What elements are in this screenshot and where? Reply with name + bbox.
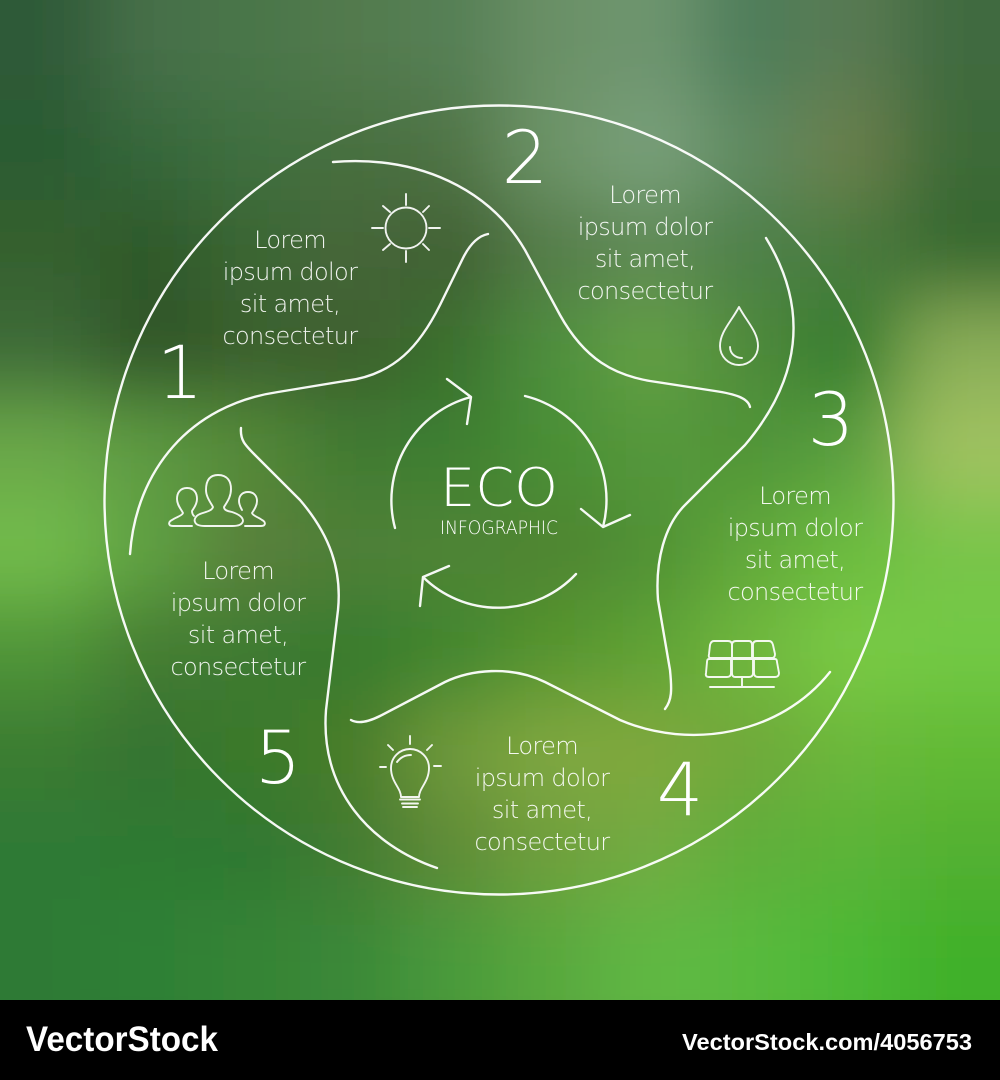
center: cycle arrows — [391, 379, 630, 608]
step 4 text: consectetur — [474, 828, 610, 856]
step 2 number: 2 — [502, 116, 548, 201]
step 3 number: 3 — [808, 378, 854, 463]
step 1 text: consectetur — [222, 322, 358, 350]
step 3 text: consectetur — [727, 578, 863, 606]
step 3 curve — [657, 238, 794, 709]
step 1 number: 1 — [157, 331, 203, 416]
step 1 text: Lorem — [254, 226, 326, 254]
footer url: VectorStock.com/4056753 — [682, 1029, 972, 1055]
step 2 text: consectetur — [577, 277, 713, 305]
step 5 curve — [241, 428, 437, 868]
INFOGRAPHIC label: INFOGRAPHIC — [440, 517, 558, 539]
icon: sun — [372, 194, 440, 262]
step 2 text: Lorem — [609, 181, 681, 209]
step 2 text: ipsum dolor — [578, 213, 713, 241]
icon: water drop — [720, 307, 758, 365]
panel: step 4 — [351, 671, 830, 856]
step 5 text: Lorem — [202, 557, 274, 585]
step 4 text: sit amet, — [492, 796, 592, 824]
step 1 text: sit amet, — [240, 290, 340, 318]
panel: step 1 — [130, 194, 488, 554]
panel: step 5 — [169, 428, 437, 868]
center title: ECO INFOGRAPHIC — [440, 458, 558, 539]
footer bar — [0, 1000, 1000, 1080]
step 1 text: ipsum dolor — [223, 258, 358, 286]
outer circle — [104, 106, 894, 894]
icon: light bulb — [380, 736, 441, 807]
step 5 text: ipsum dolor — [171, 589, 306, 617]
step 4 text: Lorem — [506, 732, 578, 760]
step 2 text: sit amet, — [595, 245, 695, 273]
step 5 number: 5 — [255, 716, 301, 801]
panel: step 3 — [657, 238, 863, 709]
step 4 curve — [351, 671, 830, 735]
step 5 text: consectetur — [170, 653, 306, 681]
step 2 curve — [333, 161, 750, 407]
panel: step 2 — [333, 116, 758, 407]
icon: people — [169, 475, 265, 526]
step 4 number: 4 — [657, 748, 703, 833]
step 4 text: ipsum dolor — [475, 764, 610, 792]
ECO label: ECO — [440, 458, 558, 519]
step 5 text: sit amet, — [188, 621, 288, 649]
footer logo: VectorStock — [26, 1019, 218, 1059]
step 3 text: sit amet, — [745, 546, 845, 574]
step 1 curve — [130, 234, 488, 554]
step 3 text: ipsum dolor — [728, 514, 863, 542]
step 3 text: Lorem — [759, 482, 831, 510]
icon: solar panel — [706, 641, 779, 687]
